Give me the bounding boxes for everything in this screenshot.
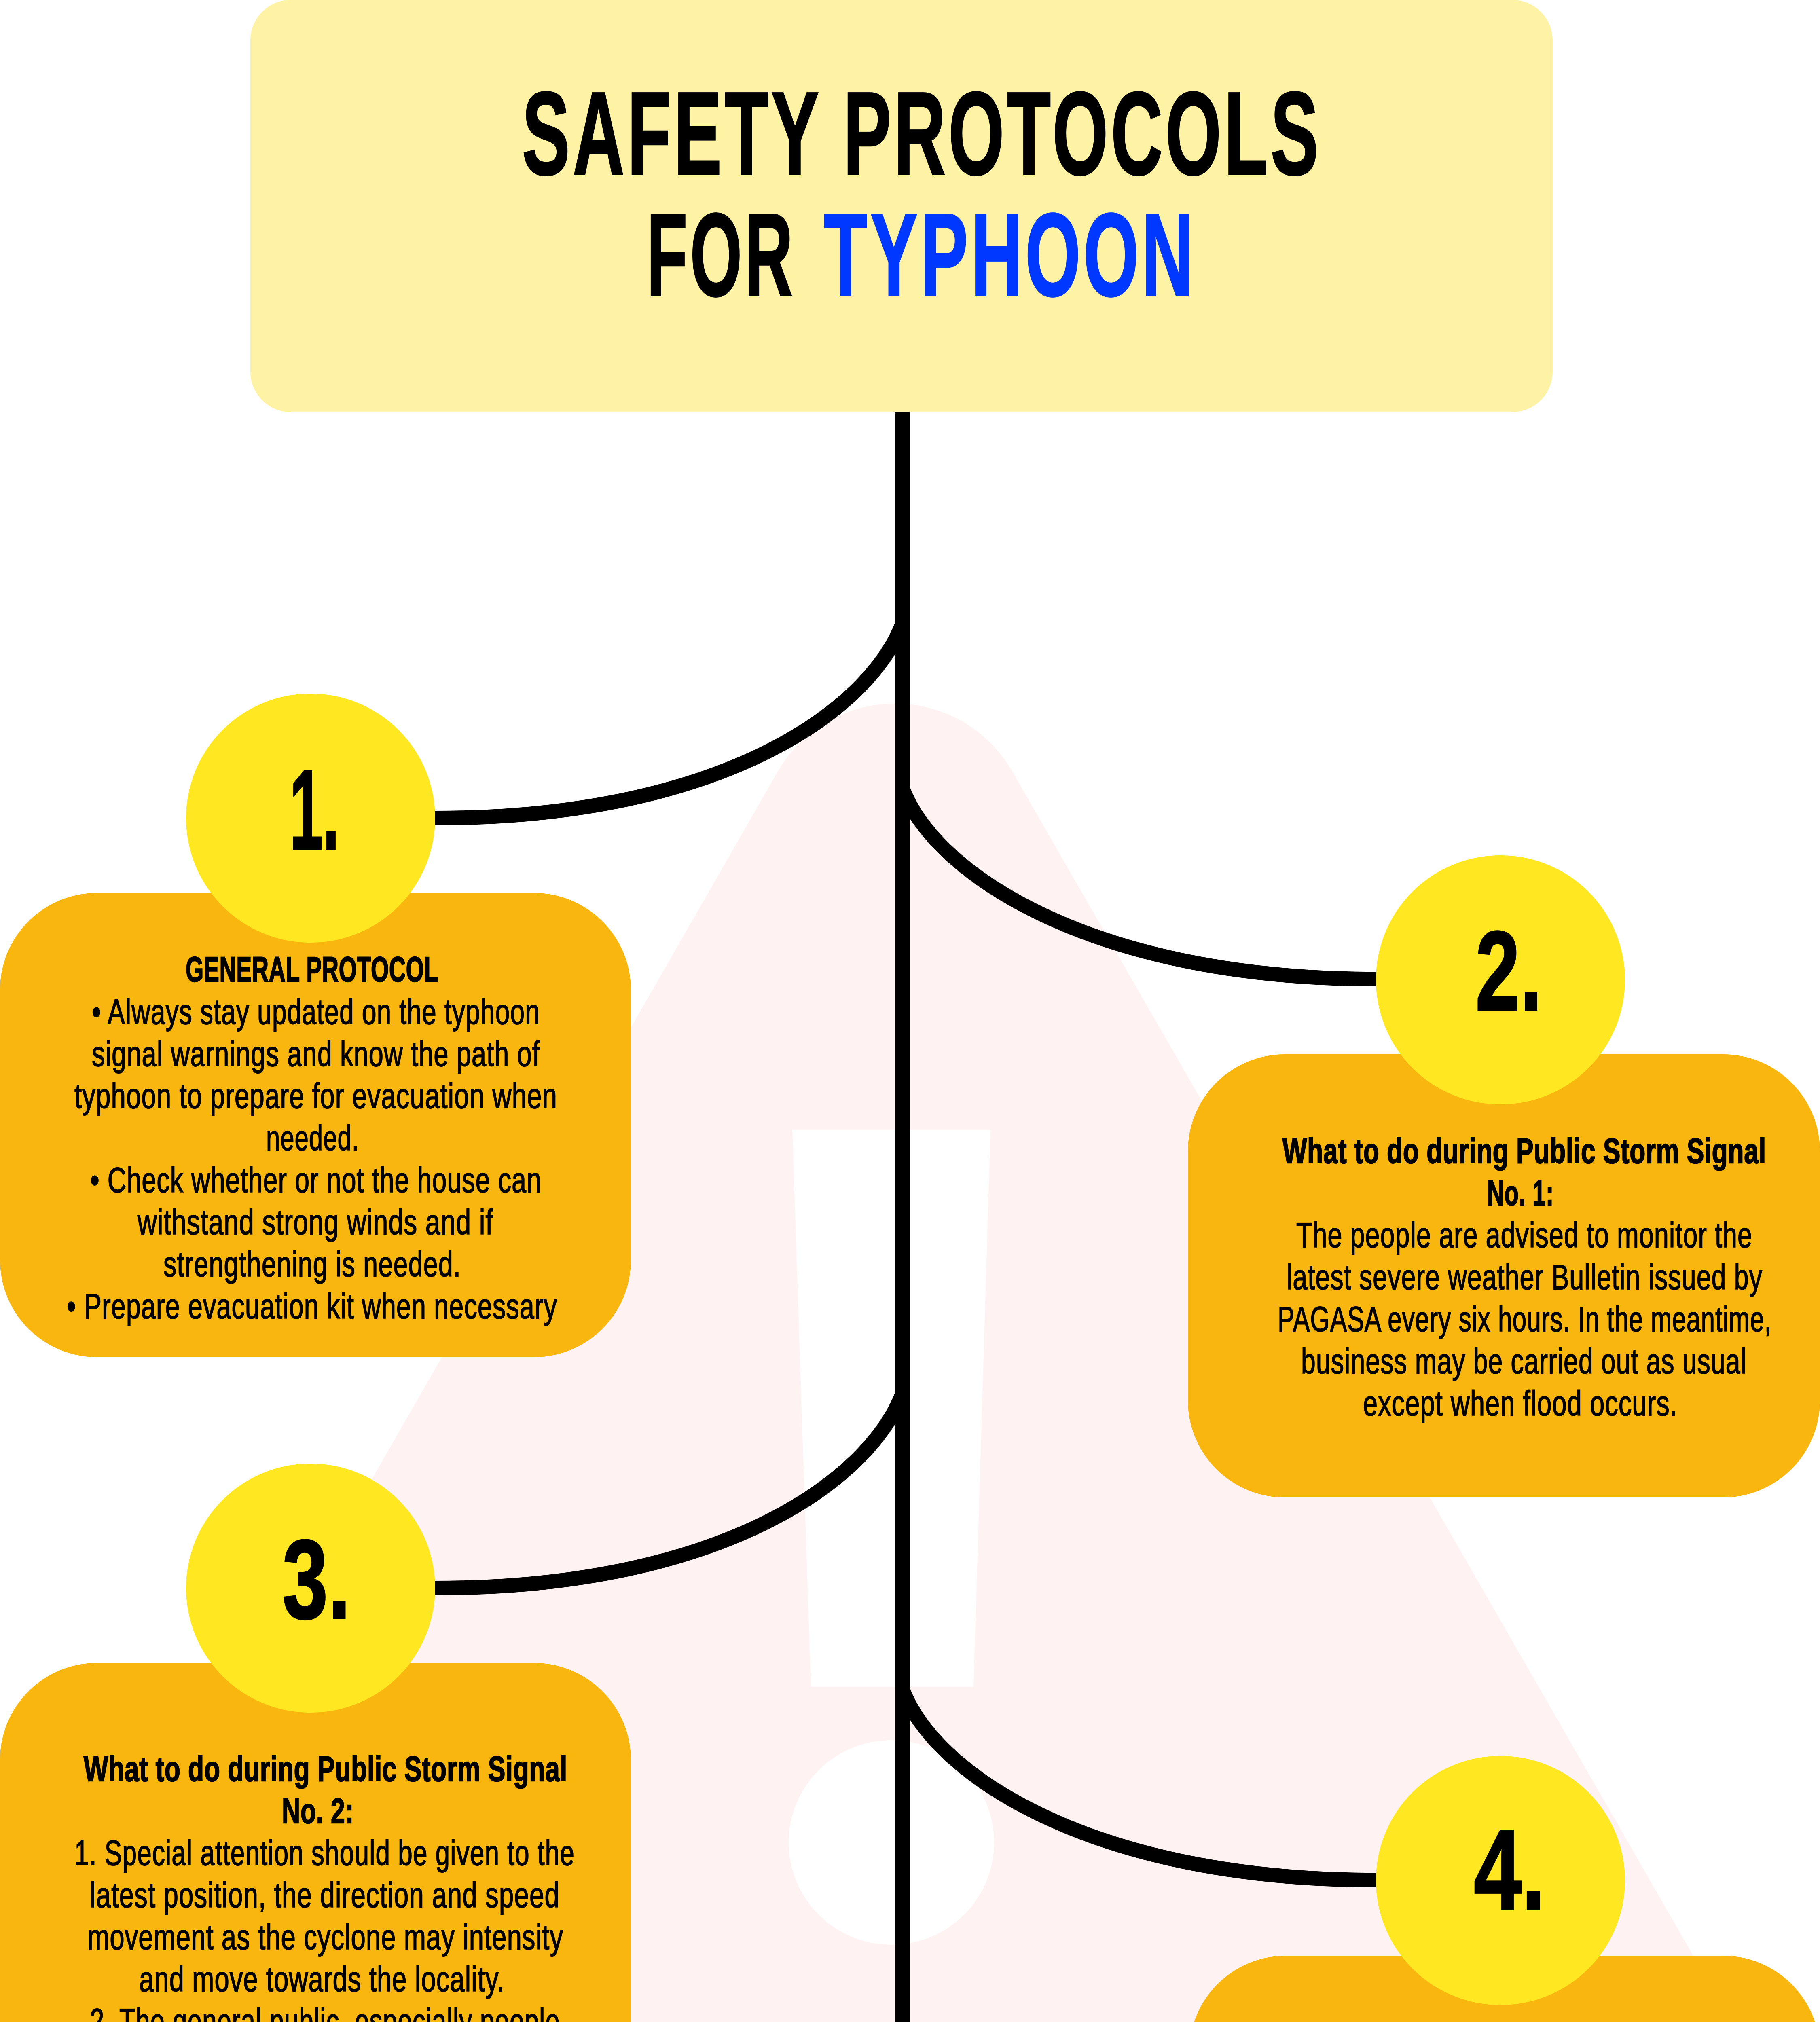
badge 3: 3. — [282, 1516, 351, 1643]
background warning triangle — [0, 704, 1820, 2022]
panel 3 text: latest position, the direction and speed — [90, 1876, 560, 1915]
badge 2: 2. — [1475, 908, 1542, 1034]
panel 1: general protocol — [0, 893, 631, 1357]
panel 1 text: • Check whether or not the house can — [90, 1161, 542, 1200]
connector: branch to step 2 — [903, 789, 1376, 979]
title panel — [250, 0, 1553, 412]
panel 3 text: movement as the cyclone may intensity — [87, 1918, 563, 1957]
badge 4 — [1376, 1756, 1625, 2005]
panel 1 text: • Prepare evacuation kit when necessary — [67, 1287, 557, 1326]
panel 3: public storm signal no. 2 — [0, 1663, 631, 2022]
panel 1 text: signal warnings and know the path of — [92, 1034, 540, 1074]
panel 1 text: • Always stay updated on the typhoon — [92, 992, 540, 1032]
panel 1 text: needed. — [266, 1119, 359, 1158]
panel 3 text: What to do during Public Storm Signal — [84, 1749, 567, 1789]
panel 2 text: No. 1: — [1487, 1174, 1554, 1213]
panel 2: public storm signal no. 1 — [1188, 1054, 1820, 1497]
panel 1 text: GENERAL PROTOCOL — [186, 950, 438, 989]
badge 1: 1. — [290, 747, 339, 873]
central timeline trunk — [895, 404, 910, 2022]
title text — [522, 68, 1321, 321]
connector: branch to step 1 — [435, 623, 903, 818]
panel 2 text — [1278, 1132, 1772, 1423]
panel 3 text — [74, 1749, 575, 2022]
badge 2 — [1376, 855, 1625, 1104]
badge 3 — [186, 1464, 435, 1713]
panel 4: public storm signal no. 3 — [1189, 1956, 1820, 2022]
panel 3 text: 1. Special attention should be given to the — [74, 1834, 575, 1873]
badge 4: 4. — [1474, 1807, 1545, 1933]
title text: TYPHOON — [824, 189, 1196, 321]
panel 1 text — [67, 950, 557, 1326]
connector: branch to step 4 — [903, 1690, 1376, 1880]
panel 1 text: typhoon to prepare for evacuation when — [74, 1077, 557, 1116]
panel 2 text: except when flood occurs. — [1363, 1384, 1678, 1423]
title text: FOR — [647, 189, 796, 321]
panel 3 text: and move towards the locality. — [139, 1960, 505, 1999]
panel 1 text: strengthening is needed. — [163, 1245, 461, 1284]
badge 1 — [186, 694, 435, 943]
panel 1 text: withstand strong winds and if — [137, 1203, 493, 1242]
title text: SAFETY PROTOCOLS — [522, 68, 1321, 199]
connector: branch to step 3 — [435, 1393, 903, 1588]
panel 3 text: No. 2: — [282, 1791, 354, 1831]
